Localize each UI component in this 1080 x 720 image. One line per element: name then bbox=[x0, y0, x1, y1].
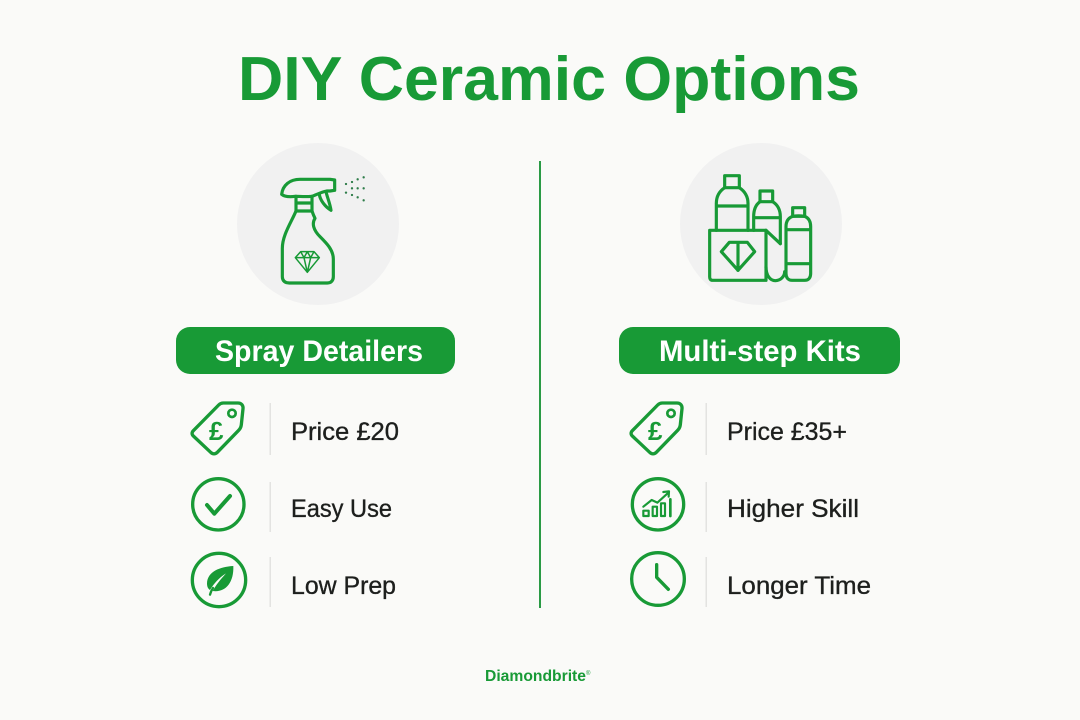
heading pill: Multi-step Kits: Multi-step Kits bbox=[659, 335, 861, 368]
row: Longer Time bbox=[632, 553, 871, 607]
row: Price £20 bbox=[192, 403, 399, 455]
icon: price tag: £ bbox=[209, 416, 224, 446]
row: Longer Time: Longer Time bbox=[727, 572, 871, 600]
icon: clock bbox=[632, 553, 684, 605]
heading pill: Multi-step Kits bbox=[619, 327, 900, 374]
footer logo: ® bbox=[586, 670, 591, 677]
row: Easy Use: Easy Use bbox=[291, 495, 392, 523]
panel: spray detailers bbox=[176, 143, 455, 607]
row: Price £20: Price £20 bbox=[291, 418, 399, 446]
row: Price £35+: Price £35+ bbox=[727, 418, 847, 446]
title: DIY Ceramic Options bbox=[238, 45, 860, 114]
icon: price tag bbox=[631, 403, 682, 454]
row: Low Prep: Low Prep bbox=[291, 572, 396, 600]
row: Price £35+ bbox=[631, 403, 847, 455]
panel: multi-step kits bbox=[619, 143, 900, 607]
heading pill: Spray Detailers: Spray Detailers bbox=[215, 335, 423, 368]
row: Higher Skill: Higher Skill bbox=[727, 495, 859, 523]
icon: price tag bbox=[192, 403, 243, 454]
row: Low Prep bbox=[192, 553, 396, 607]
icon: price tag: £ bbox=[648, 416, 663, 446]
center divider bbox=[539, 161, 541, 608]
icon: rising bar chart bbox=[632, 479, 684, 530]
row: Higher Skill bbox=[632, 479, 859, 532]
heading pill: Spray Detailers bbox=[176, 327, 455, 374]
icon: leaf bbox=[192, 553, 246, 607]
icon: spray bottle bbox=[237, 143, 399, 305]
footer logo: Diamondbrite bbox=[485, 668, 586, 685]
icon: check mark bbox=[193, 479, 244, 530]
icon: bottles and box bbox=[680, 143, 842, 305]
row: Easy Use bbox=[193, 479, 392, 532]
